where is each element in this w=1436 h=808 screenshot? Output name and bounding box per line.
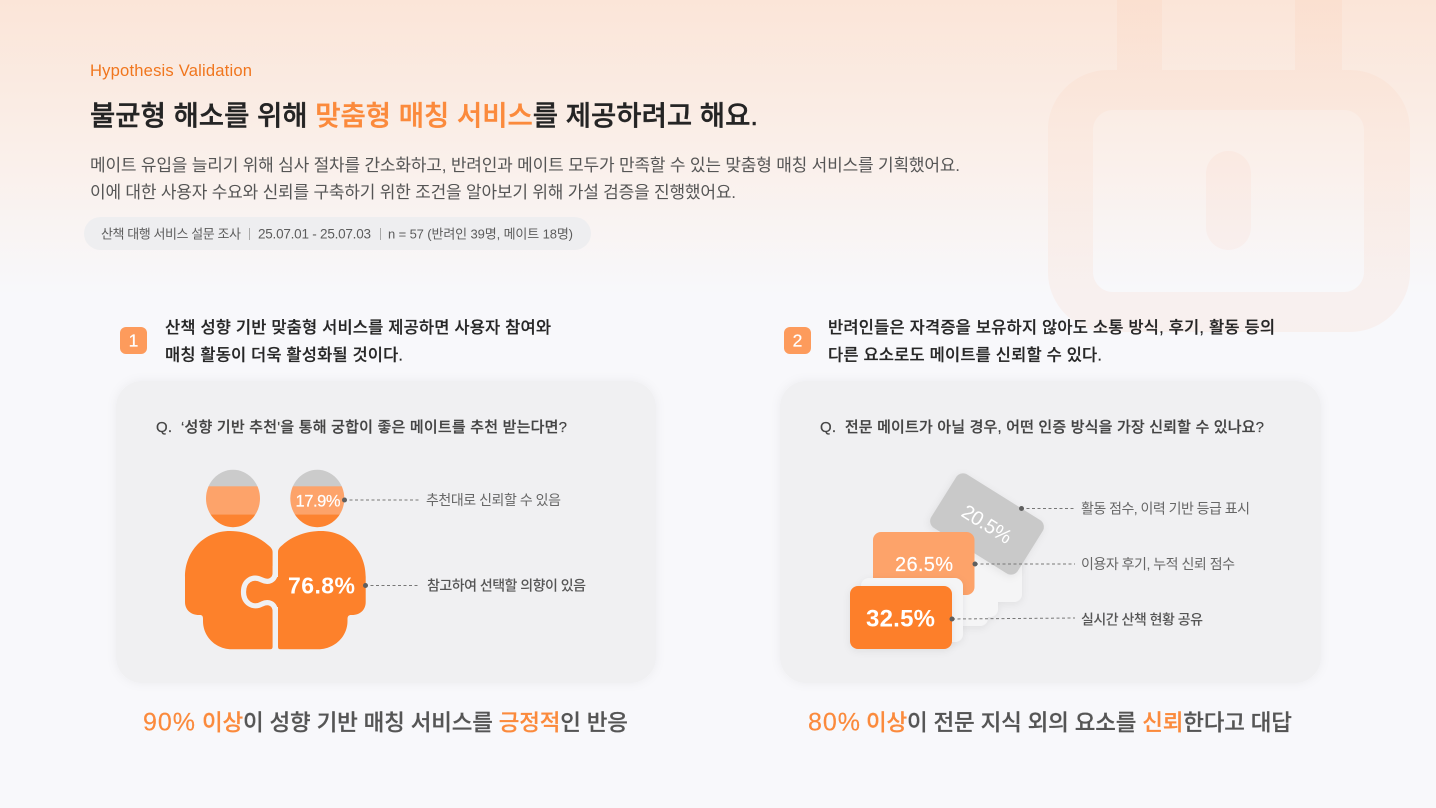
takeaway 1: 이상이 성향 기반 매칭 서비스를 긍정적인 반응 xyxy=(202,710,628,736)
white card behind 32.5% xyxy=(861,578,963,642)
callout: 26.5%: 이용자 후기, 누적 신뢰 점수 xyxy=(1081,556,1235,572)
callout: 17.9%: 추천대로 신뢰할 수 있음 xyxy=(426,492,561,508)
value 17.9%: 17.9% xyxy=(296,492,341,510)
card 20.5%: 20.5% xyxy=(957,501,1016,549)
hypothesis 2 heading xyxy=(784,318,1275,364)
card 26.5%: 26.5% xyxy=(895,554,953,576)
eyebrow label: Hypothesis Validation xyxy=(90,61,252,80)
panel: survey question 1 xyxy=(116,381,656,683)
survey info chip: n = 57 (반려인 39명, 메이트 18명) xyxy=(388,226,573,242)
title: 불균형 해소를 위해 맞춤형 매칭 서비스를 제공하려고 해요. xyxy=(90,100,758,131)
takeaway 2: 80% xyxy=(808,708,860,736)
hypothesis 1 heading xyxy=(120,318,551,364)
hypothesis 1 text: 매칭 활동이 더욱 활성화될 것이다. xyxy=(165,346,403,364)
hypothesis 2 text xyxy=(828,318,1275,364)
callout: 76.8%: 참고하여 선택할 의향이 있음 xyxy=(427,578,586,594)
backing white cards xyxy=(886,539,1022,626)
card 20.5% xyxy=(927,470,1047,578)
hypothesis 1 text xyxy=(165,318,551,364)
badge 2 xyxy=(784,327,811,354)
takeaway 1: 90% xyxy=(143,708,195,736)
puzzle bodies xyxy=(185,531,366,649)
survey info chip: 25.07.01 - 25.07.03 xyxy=(258,226,371,242)
panel: survey question 2 xyxy=(780,381,1321,683)
survey info chip xyxy=(84,217,591,250)
callout: 32.5%: 실시간 산책 현황 공유 xyxy=(1081,612,1203,628)
icon: two people puzzle chart xyxy=(185,465,366,649)
stacked cards chart xyxy=(850,470,1047,649)
background gradient xyxy=(0,0,1436,295)
description text: 이에 대한 사용자 수요와 신뢰를 구축하기 위한 조건을 알아보기 위해 가설 검증을 진행했어요. xyxy=(90,183,736,202)
hypothesis 2 text: 다른 요소로도 메이트를 신뢰할 수 있다. xyxy=(828,346,1102,364)
description text: 메이트 유입을 늘리기 위해 심사 절차를 간소화하고, 반려인과 메이트 모두가 만족할 수 있는 맞춤형 매칭 서비스를 기획했어요. xyxy=(90,156,960,175)
badge 2: 2 xyxy=(793,330,802,350)
callout: 26.5% xyxy=(972,556,1235,572)
question 1: Q. ‘성향 기반 추천'을 통해 궁합이 좋은 메이트를 추천 받는다면? xyxy=(156,419,567,436)
callout: 17.9% xyxy=(342,492,561,508)
badge 1: 1 xyxy=(129,330,138,350)
right head xyxy=(290,470,344,528)
keyhole xyxy=(1206,151,1251,250)
card 26.5% xyxy=(873,532,974,595)
left head xyxy=(206,470,260,528)
card 32.5% xyxy=(850,586,952,649)
icon: background padlock xyxy=(1048,0,1410,332)
value 76.8%: 76.8% xyxy=(288,572,355,598)
takeaway 2: 이상이 전문 지식 외의 요소를 신뢰한다고 대답 xyxy=(866,710,1292,736)
badge 1 xyxy=(120,327,147,354)
description text xyxy=(90,156,960,202)
hypothesis 1 text: 산책 성향 기반 맞춤형 서비스를 제공하면 사용자 참여와 xyxy=(165,318,551,337)
callout: 32.5% xyxy=(950,612,1203,628)
hypothesis 2 text: 반려인들은 자격증을 보유하지 않아도 소통 방식, 후기, 활동 등의 xyxy=(828,318,1275,337)
survey info chip: 산책 대행 서비스 설문 조사 xyxy=(101,226,241,242)
question 2: Q. 전문 메이트가 아닐 경우, 어떤 인증 방식을 가장 신뢰할 수 있나요? xyxy=(820,419,1264,436)
card 32.5%: 32.5% xyxy=(866,606,935,632)
callout: 20.5%: 활동 점수, 이력 기반 등급 표시 xyxy=(1081,500,1250,516)
